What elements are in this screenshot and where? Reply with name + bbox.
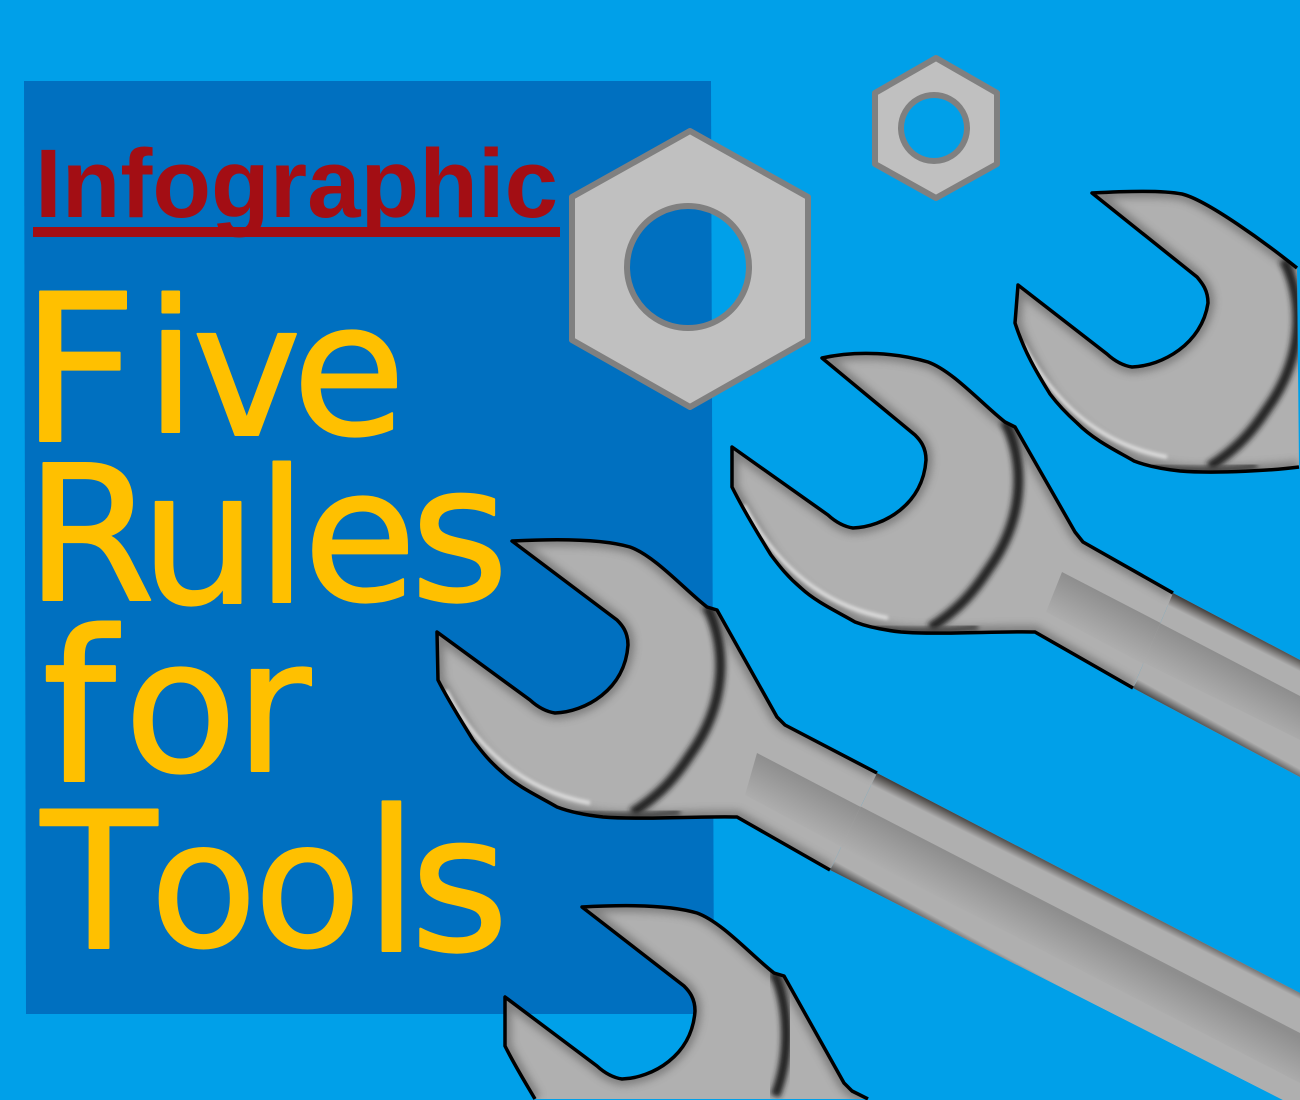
- title: Five Rules for Tools: v: [192, 263, 301, 479]
- title: Five Rules for Tools: o: [150, 785, 257, 988]
- title: Five Rules for Tools: o: [124, 599, 237, 815]
- title: Five Rules for Tools: r: [235, 599, 312, 815]
- panel: title background: [24, 81, 714, 1014]
- icon: large hex nut: [572, 131, 808, 407]
- icon: wrench main: [437, 540, 1300, 1100]
- title: Five Rules for Tools: s: [410, 424, 509, 645]
- title: Five Rules for Tools: F: [20, 252, 138, 490]
- title: Five Rules for Tools: R: [25, 426, 156, 645]
- title: Five Rules for Tools: s: [410, 774, 509, 995]
- title: Five Rules for Tools: e: [303, 428, 417, 644]
- title: Five Rules for Tools: e: [292, 262, 406, 478]
- title: Five Rules for Tools: u: [140, 431, 257, 647]
- icon: wrench bottom: [505, 906, 868, 1099]
- title: Five Rules for Tools: [20, 252, 509, 998]
- title: Five Rules for Tools: i: [145, 260, 196, 476]
- title: Five Rules for Tools: l: [364, 769, 419, 998]
- title: Five Rules for Tools: f: [42, 586, 120, 831]
- heading: Infographic: Infographic: [35, 129, 558, 238]
- icon: small hex nut: [875, 58, 997, 198]
- title: Five Rules for Tools: o: [254, 785, 361, 988]
- title: Five Rules for Tools: l: [256, 430, 307, 646]
- title: Five Rules for Tools: T: [40, 772, 158, 993]
- icon: wrench second: [732, 353, 1300, 777]
- icon: wrench top right: [1015, 191, 1299, 472]
